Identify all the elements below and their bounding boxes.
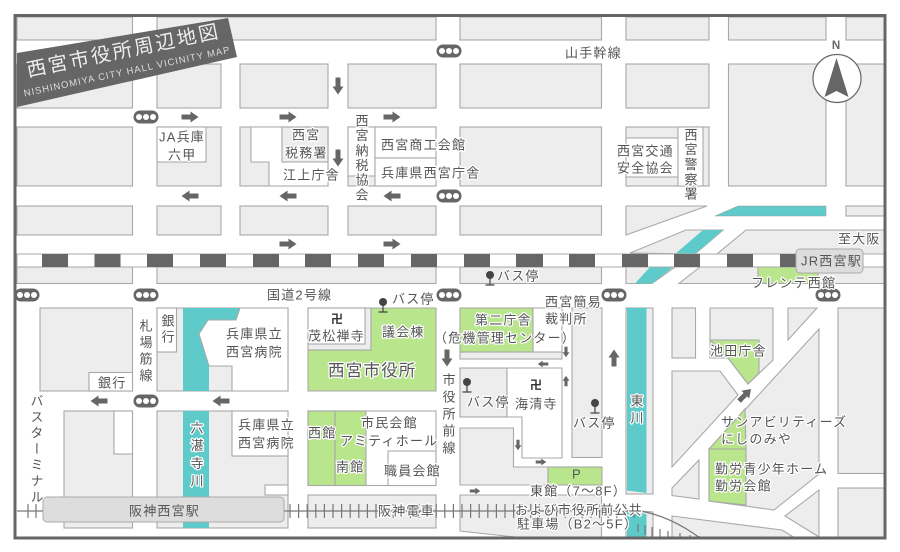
road and place labels: アミティホール: [340, 434, 438, 448]
title banner: 西宮市役所周辺地図: [25, 21, 222, 82]
road and place labels: 国道2号線: [267, 288, 332, 302]
JR railway: [17, 254, 885, 267]
road and place labels: 第二庁舎: [475, 312, 532, 328]
Hanshin Nishinomiya station: 阪神西宮駅: [129, 504, 200, 518]
road and place labels: バス停: [497, 268, 540, 284]
road and place labels: 西宮商工会館: [381, 138, 466, 152]
rivers: [183, 206, 826, 538]
title banner: NISHINOMIYA CITY HALL VICINITY MAP: [23, 45, 232, 99]
north arrow: [813, 40, 861, 102]
road and place labels: 勤労会館: [715, 478, 772, 494]
road and place labels: 西宮簡易: [545, 294, 602, 310]
road and place labels: 東川: [628, 393, 644, 428]
road and place labels: 西宮: [292, 128, 320, 142]
north arrow: N: [832, 40, 840, 52]
road and place labels: 六湛寺川: [188, 421, 204, 492]
road and place labels: フレンテ西館: [751, 276, 836, 290]
road and place labels: 東館（7〜8F）: [530, 484, 627, 498]
road and place labels: （危機管理センター）: [434, 330, 576, 346]
JR Nishinomiya station: [796, 249, 863, 273]
road and place labels: バス停: [573, 416, 616, 430]
road and place labels: 駐車場（B2〜5F）: [517, 516, 638, 532]
Hanshin Nishinomiya station: [43, 497, 284, 522]
road and place labels: 職員会館: [384, 464, 441, 478]
road and place labels: 西宮納税協会: [354, 114, 368, 203]
road and place labels: 卍: [530, 378, 542, 392]
JR Nishinomiya station: JR西宮駅: [801, 254, 862, 268]
road and place labels: 西宮病院: [226, 344, 283, 360]
road and place labels: 茂松禅寺: [308, 328, 365, 344]
Hanshin railway: [17, 504, 700, 538]
road and place labels: バス停: [392, 292, 435, 306]
road and place labels: 西宮警察署: [682, 128, 698, 202]
road and place labels: 兵庫県立: [226, 326, 283, 342]
road and place labels: 銀行: [160, 314, 174, 346]
road and place labels: 南館: [336, 460, 364, 474]
road and place labels: バスターミナル: [28, 394, 44, 506]
road and place labels: 西館: [308, 426, 336, 440]
traffic signals: [14, 44, 840, 408]
road and place labels: 安全協会: [617, 160, 674, 176]
road and place labels: 市役所前線: [440, 373, 456, 458]
road and place labels: 税務署: [285, 146, 328, 160]
bus stop pins: [378, 271, 600, 413]
road and place labels: 至大阪: [838, 232, 881, 246]
road and place labels: 六甲: [168, 148, 196, 162]
road and place labels: 西宮交通: [617, 144, 674, 158]
white and green building plots: [89, 127, 818, 505]
road and place labels: P: [572, 466, 582, 482]
road and place labels: サンアビリティーズ: [721, 414, 847, 430]
one-way arrows: [90, 78, 755, 494]
road and place labels: 兵庫県立: [238, 418, 295, 432]
title banner: [17, 18, 237, 107]
road and place labels: および市役所前公共: [515, 502, 643, 518]
road and place labels: にしのみや: [721, 432, 792, 446]
road and place labels: 卍: [331, 312, 343, 326]
road and place labels: 勤労青少年ホーム: [715, 462, 828, 476]
road and place labels: 札場筋線: [138, 319, 152, 385]
road and place labels: 池田庁舎: [710, 344, 767, 358]
road and place labels: 西宮病院: [238, 436, 295, 450]
road and place labels: 市民会館: [361, 416, 418, 430]
road and place labels: JA兵庫: [159, 130, 205, 144]
road and place labels: 西宮市役所: [328, 361, 416, 380]
road and place labels: 兵庫県西宮庁舎: [381, 166, 480, 180]
road and place labels: 裁判所: [545, 312, 588, 326]
road and place labels: 阪神電車: [378, 504, 435, 518]
road and place labels: 海清寺: [515, 396, 558, 412]
road and place labels: 山手幹線: [565, 46, 622, 60]
road and place labels: 銀行: [98, 376, 126, 390]
road and place labels: 江上庁舎: [283, 168, 340, 182]
road and place labels: 議会棟: [382, 324, 425, 340]
road and place labels: バス停: [467, 394, 510, 410]
